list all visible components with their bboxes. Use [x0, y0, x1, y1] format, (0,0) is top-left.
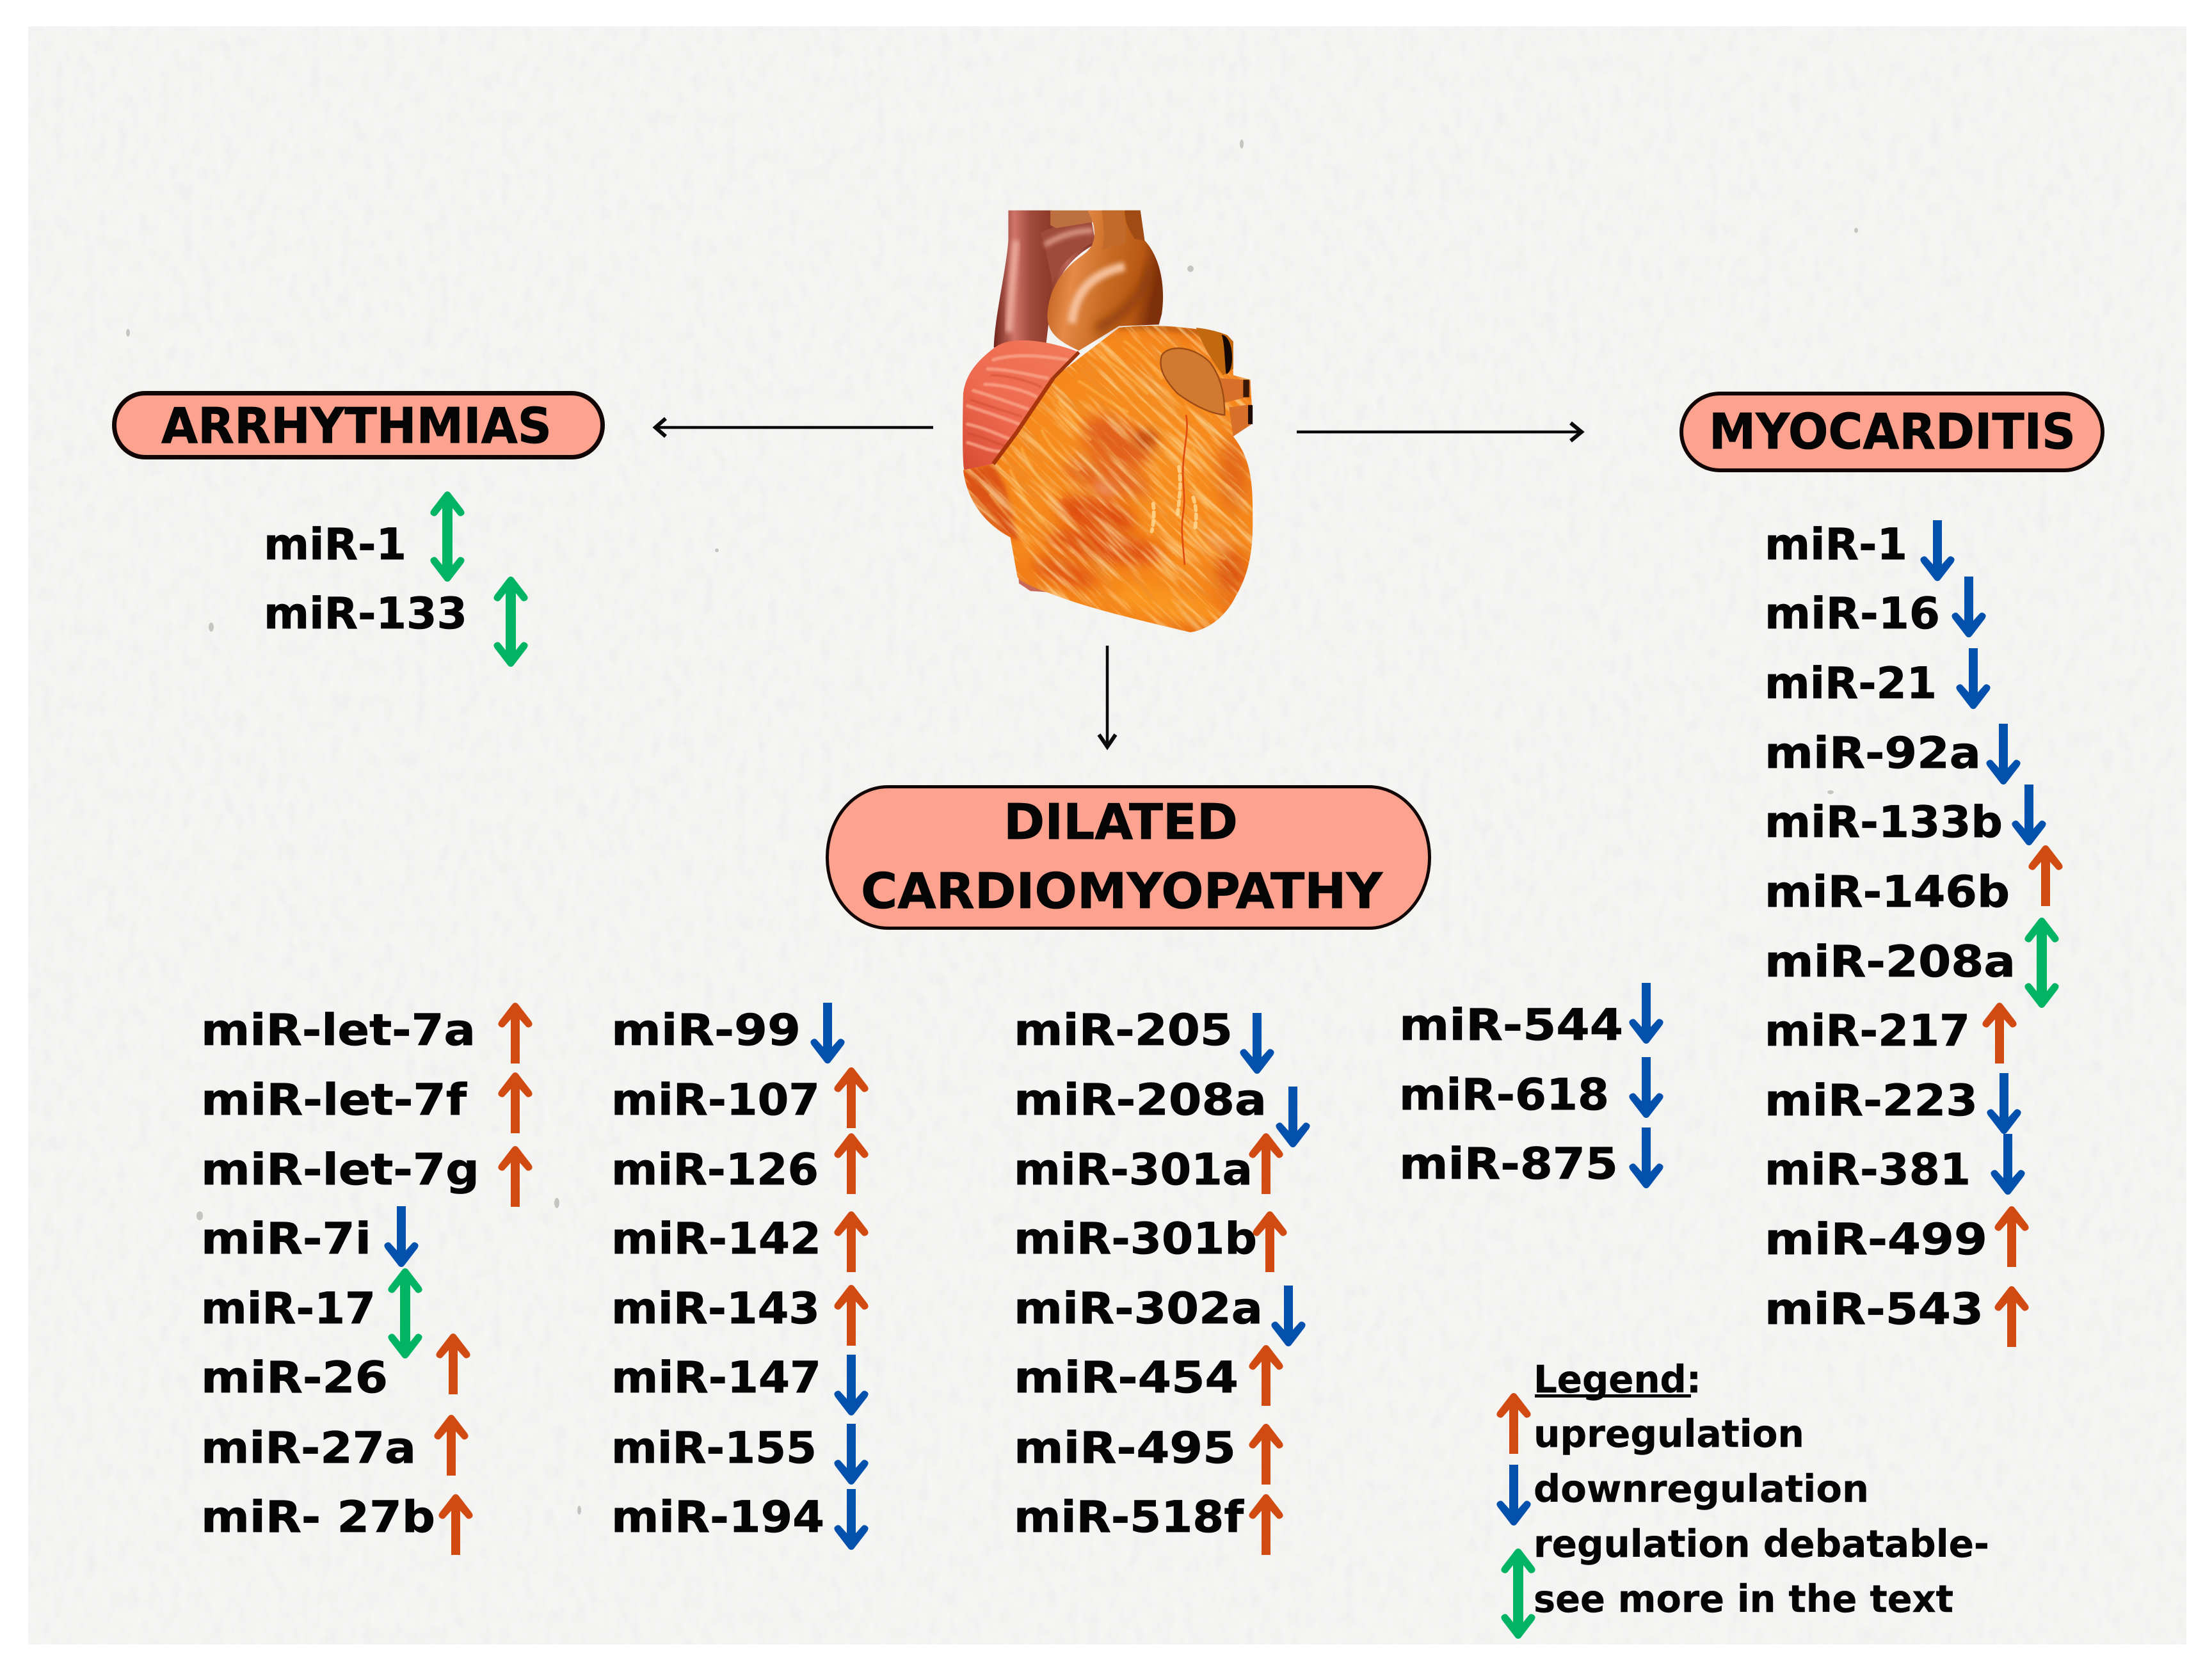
heading: dilated cardiomyopathy — [827, 787, 1430, 928]
miR-107 up: miR-107 — [611, 1075, 820, 1126]
heart illustration — [689, 36, 1513, 927]
miR-381 down: miR-381 — [1765, 1145, 1971, 1195]
miR-223 down: miR-223 — [1765, 1076, 1978, 1126]
myocarditis list — [1765, 520, 2063, 1347]
icon: right atrium — [963, 340, 1079, 470]
miR-155 down — [611, 1423, 869, 1485]
legend: regulation debatable: regulation debatable- — [1534, 1522, 1989, 1566]
miR-let-7g up — [201, 1145, 533, 1207]
miR-let-7f up: miR-let-7f — [201, 1075, 468, 1126]
miR-208a down — [1014, 1075, 1310, 1147]
icon: superior vena cava — [994, 211, 1096, 347]
miR-875 down — [1399, 1127, 1663, 1190]
miR-26 up — [201, 1334, 470, 1403]
miR-147 down — [611, 1353, 869, 1415]
miR-499 up — [1765, 1206, 2029, 1267]
miR-107 up — [611, 1067, 869, 1128]
miR-302a down — [1014, 1284, 1306, 1346]
icon: pulmonary vessels — [1196, 328, 1253, 436]
miR-543 up: miR-543 — [1765, 1284, 1984, 1335]
miR-99 down: miR-99 — [611, 1005, 801, 1056]
miR-21 down: miR-21 — [1765, 658, 1937, 709]
miR-143 up: miR-143 — [611, 1284, 820, 1334]
heading: dilated cardiomyopathy: CARDIOMYOPATHY — [861, 863, 1383, 920]
miR-17 debatable: miR-17 — [201, 1284, 376, 1334]
miR-194 down — [611, 1489, 869, 1550]
heading: myocarditis: MYOCARDITIS — [1709, 404, 2076, 461]
miR-27b up — [201, 1492, 473, 1555]
miR-1 debatable — [264, 491, 465, 582]
miR-92a down — [1765, 724, 2021, 785]
miR-let-7f up — [201, 1072, 533, 1133]
miR-126 up — [611, 1133, 869, 1195]
miR-302a down: miR-302a — [1014, 1284, 1263, 1334]
legend — [1496, 1357, 1989, 1639]
miR-133b down: miR-133b — [1765, 797, 2003, 848]
icon: ventricles — [963, 326, 1253, 632]
miR-21 down — [1765, 648, 1991, 709]
miR-let-7g up: miR-let-7g — [201, 1145, 479, 1195]
legend: upregulation: upregulation — [1534, 1412, 1804, 1456]
heading: arrhythmias: ARRHYTHMIAS — [161, 398, 552, 455]
arrhythmias list — [264, 491, 528, 667]
miR-205 down — [1014, 1005, 1274, 1074]
legend: regulation debatable — [1501, 1522, 1989, 1639]
arrow: heart to arrhythmias — [655, 418, 933, 436]
legend: upregulation — [1496, 1393, 1804, 1456]
miR-208a debatable: miR-208a — [1765, 937, 2016, 987]
miR-146b up: miR-146b — [1765, 867, 2010, 918]
miR-27b up: miR- 27b — [201, 1492, 435, 1543]
legend: regulation debatable: see more in the text — [1534, 1577, 1953, 1621]
miR-301b up: miR-301b — [1014, 1214, 1257, 1264]
miR-495 up — [1014, 1423, 1283, 1485]
miR-27a up: miR-27a — [201, 1423, 416, 1474]
miR-618 down — [1399, 1057, 1663, 1120]
miR-92a down: miR-92a — [1765, 728, 1981, 779]
miR-495 up: miR-495 — [1014, 1423, 1236, 1474]
miR-27a up — [201, 1415, 469, 1476]
miR-381 down — [1765, 1134, 2025, 1195]
miR-146b up — [1765, 845, 2063, 918]
dilated cardiomyopathy column 4 — [1399, 983, 1663, 1190]
miR-133 debatable — [264, 577, 528, 667]
miR-155 down: miR-155 — [611, 1423, 817, 1474]
miR-618 down: miR-618 — [1399, 1070, 1609, 1120]
miR-7i down: miR-7i — [201, 1214, 371, 1264]
miR-1 down — [1765, 520, 1955, 581]
miR-194 down: miR-194 — [611, 1492, 824, 1543]
miR-217 up — [1765, 1003, 2017, 1064]
dilated cardiomyopathy column 2 — [611, 1003, 869, 1550]
miR-217 up: miR-217 — [1765, 1006, 1970, 1056]
miR-143 up — [611, 1284, 869, 1346]
dilated cardiomyopathy column 3 — [1014, 1005, 1310, 1555]
miR-16 down: miR-16 — [1765, 589, 1940, 639]
dilated cardiomyopathy column 1 — [201, 1003, 533, 1555]
legend: downregulation: downregulation — [1534, 1467, 1869, 1511]
miR-99 down — [611, 1003, 845, 1064]
miR-126 up: miR-126 — [611, 1145, 819, 1195]
heading: dilated cardiomyopathy: DILATED — [1004, 794, 1238, 851]
miR-let-7a up: miR-let-7a — [201, 1005, 476, 1056]
heading: myocarditis — [1681, 394, 2103, 470]
miR-17 debatable — [201, 1268, 422, 1358]
legend: downregulation — [1496, 1465, 1869, 1526]
miR-544 down — [1399, 983, 1663, 1051]
miR-223 down — [1765, 1073, 2021, 1134]
miR-208a debatable — [1765, 918, 2059, 1008]
arrow: heart to myocarditis — [1297, 423, 1582, 441]
miR-142 up — [611, 1211, 869, 1272]
miR-let-7a up — [201, 1003, 533, 1064]
miR-875 down: miR-875 — [1399, 1139, 1618, 1190]
miR-26 up: miR-26 — [201, 1353, 388, 1403]
miR-147 down: miR-147 — [611, 1353, 821, 1403]
miR-205 down: miR-205 — [1014, 1005, 1233, 1056]
miR-301a up: miR-301a — [1014, 1145, 1253, 1195]
miR-454 up: miR-454 — [1014, 1353, 1238, 1403]
arrow: heart to dilated cardiomyopathy — [1099, 646, 1116, 747]
miR-142 up: miR-142 — [611, 1214, 821, 1264]
miR-1 debatable: miR-1 — [264, 520, 406, 570]
miR-454 up — [1014, 1345, 1283, 1406]
miR-518f up: miR-518f — [1014, 1492, 1244, 1543]
legend title: Legend: — [1534, 1357, 1701, 1401]
miR-543 up — [1765, 1284, 2029, 1347]
miR-208a down: miR-208a — [1014, 1075, 1267, 1126]
miR-7i down — [201, 1206, 419, 1267]
miR-133b down — [1765, 785, 2046, 848]
miR-1 down: miR-1 — [1765, 520, 1907, 570]
icon: vessel branches at top — [1050, 211, 1093, 228]
icon: aorta — [1047, 211, 1163, 351]
miR-133 debatable: miR-133 — [264, 589, 467, 639]
miR-518f up — [1014, 1492, 1283, 1555]
miR-544 down: miR-544 — [1399, 1000, 1623, 1051]
miR-16 down — [1765, 577, 1986, 639]
miR-499 up: miR-499 — [1765, 1215, 1987, 1265]
icon: left auricle — [1160, 348, 1224, 415]
